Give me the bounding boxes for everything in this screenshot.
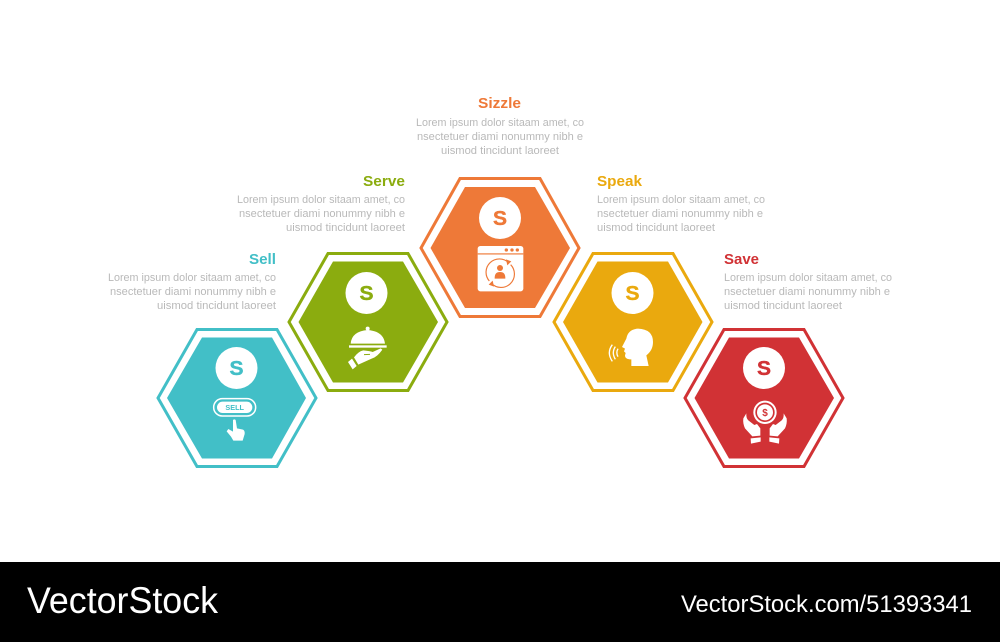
title: Serve: Serve <box>363 173 405 190</box>
badge: Serve S <box>346 272 388 314</box>
badge: Serve S: S <box>360 283 374 305</box>
title: Speak: Speak <box>597 173 643 190</box>
text: Save description: Lorem ipsum dolor sitaam amet, co <box>724 272 892 284</box>
text: Sizzle description <box>416 117 584 157</box>
text: Sell description: Lorem ipsum dolor sitaam amet, co <box>108 272 276 284</box>
hexagon: Sell <box>158 330 316 466</box>
badge: Save S <box>743 347 785 389</box>
icon: sell button with pointing hand <box>214 399 256 441</box>
text: Sizzle description: uismod tincidunt laoreet <box>441 145 559 157</box>
badge: Sell S: S <box>230 358 244 380</box>
text: Sizzle description: Lorem ipsum dolor sitaam amet, co <box>416 117 584 129</box>
text: Sell description: uismod tincidunt laoreet <box>157 300 276 312</box>
text: Save description <box>724 272 892 312</box>
badge: Speak S <box>612 272 654 314</box>
text: Save description: nsectetuer diami nonummy nibh e <box>724 286 890 298</box>
text: Sell description <box>108 272 276 312</box>
text: Speak description: Lorem ipsum dolor sitaam amet, co <box>597 194 765 206</box>
icon: hands holding dollar coin <box>743 401 787 444</box>
footer id: VectorStock.com/51393341 <box>681 591 972 618</box>
panel: Save step <box>685 251 892 466</box>
hexagon: Save <box>685 330 843 466</box>
footer bar <box>0 562 1000 642</box>
title: Sizzle: Sizzle <box>478 95 521 112</box>
badge: Sell S <box>216 347 258 389</box>
icon: speaking head <box>609 329 653 366</box>
footer logo: VectorStock <box>27 580 218 621</box>
badge: Sizzle S: S <box>493 208 507 230</box>
text: Serve description: nsectetuer diami nonummy nibh e <box>239 208 405 220</box>
icon: browser window with user cycle <box>478 246 523 291</box>
text: Speak description: uismod tincidunt laoreet <box>597 222 715 234</box>
panel: Sell step <box>108 251 316 466</box>
icon: sell button with pointing hand: SELL <box>225 403 245 412</box>
panel: Speak step <box>554 173 765 390</box>
text: Serve description: Lorem ipsum dolor sitaam amet, co <box>237 194 405 206</box>
title: Save: Save <box>724 251 759 268</box>
text: Sizzle description: nsectetuer diami nonummy nibh e <box>417 131 583 143</box>
badge: Sizzle S <box>479 197 521 239</box>
hexagon: Serve <box>289 254 447 390</box>
title: Sell: Sell <box>249 251 276 268</box>
text: Sell description: nsectetuer diami nonummy nibh e <box>110 286 276 298</box>
icon: serving cloche on hand <box>348 327 387 369</box>
icon: hands holding dollar coin: $ <box>762 408 768 419</box>
badge: Speak S: S <box>626 283 640 305</box>
text: Speak description <box>597 194 765 234</box>
hexagon: Sizzle <box>421 178 579 316</box>
badge: Save S: S <box>757 358 771 380</box>
text: Speak description: nsectetuer diami nonummy nibh e <box>597 208 763 220</box>
text: Serve description: uismod tincidunt laoreet <box>286 222 405 234</box>
text: Serve description <box>237 194 405 234</box>
text: Save description: uismod tincidunt laoreet <box>724 300 842 312</box>
panel: Serve step <box>237 173 447 390</box>
panel: Sizzle step <box>416 95 584 316</box>
hexagon: Speak <box>554 254 712 390</box>
